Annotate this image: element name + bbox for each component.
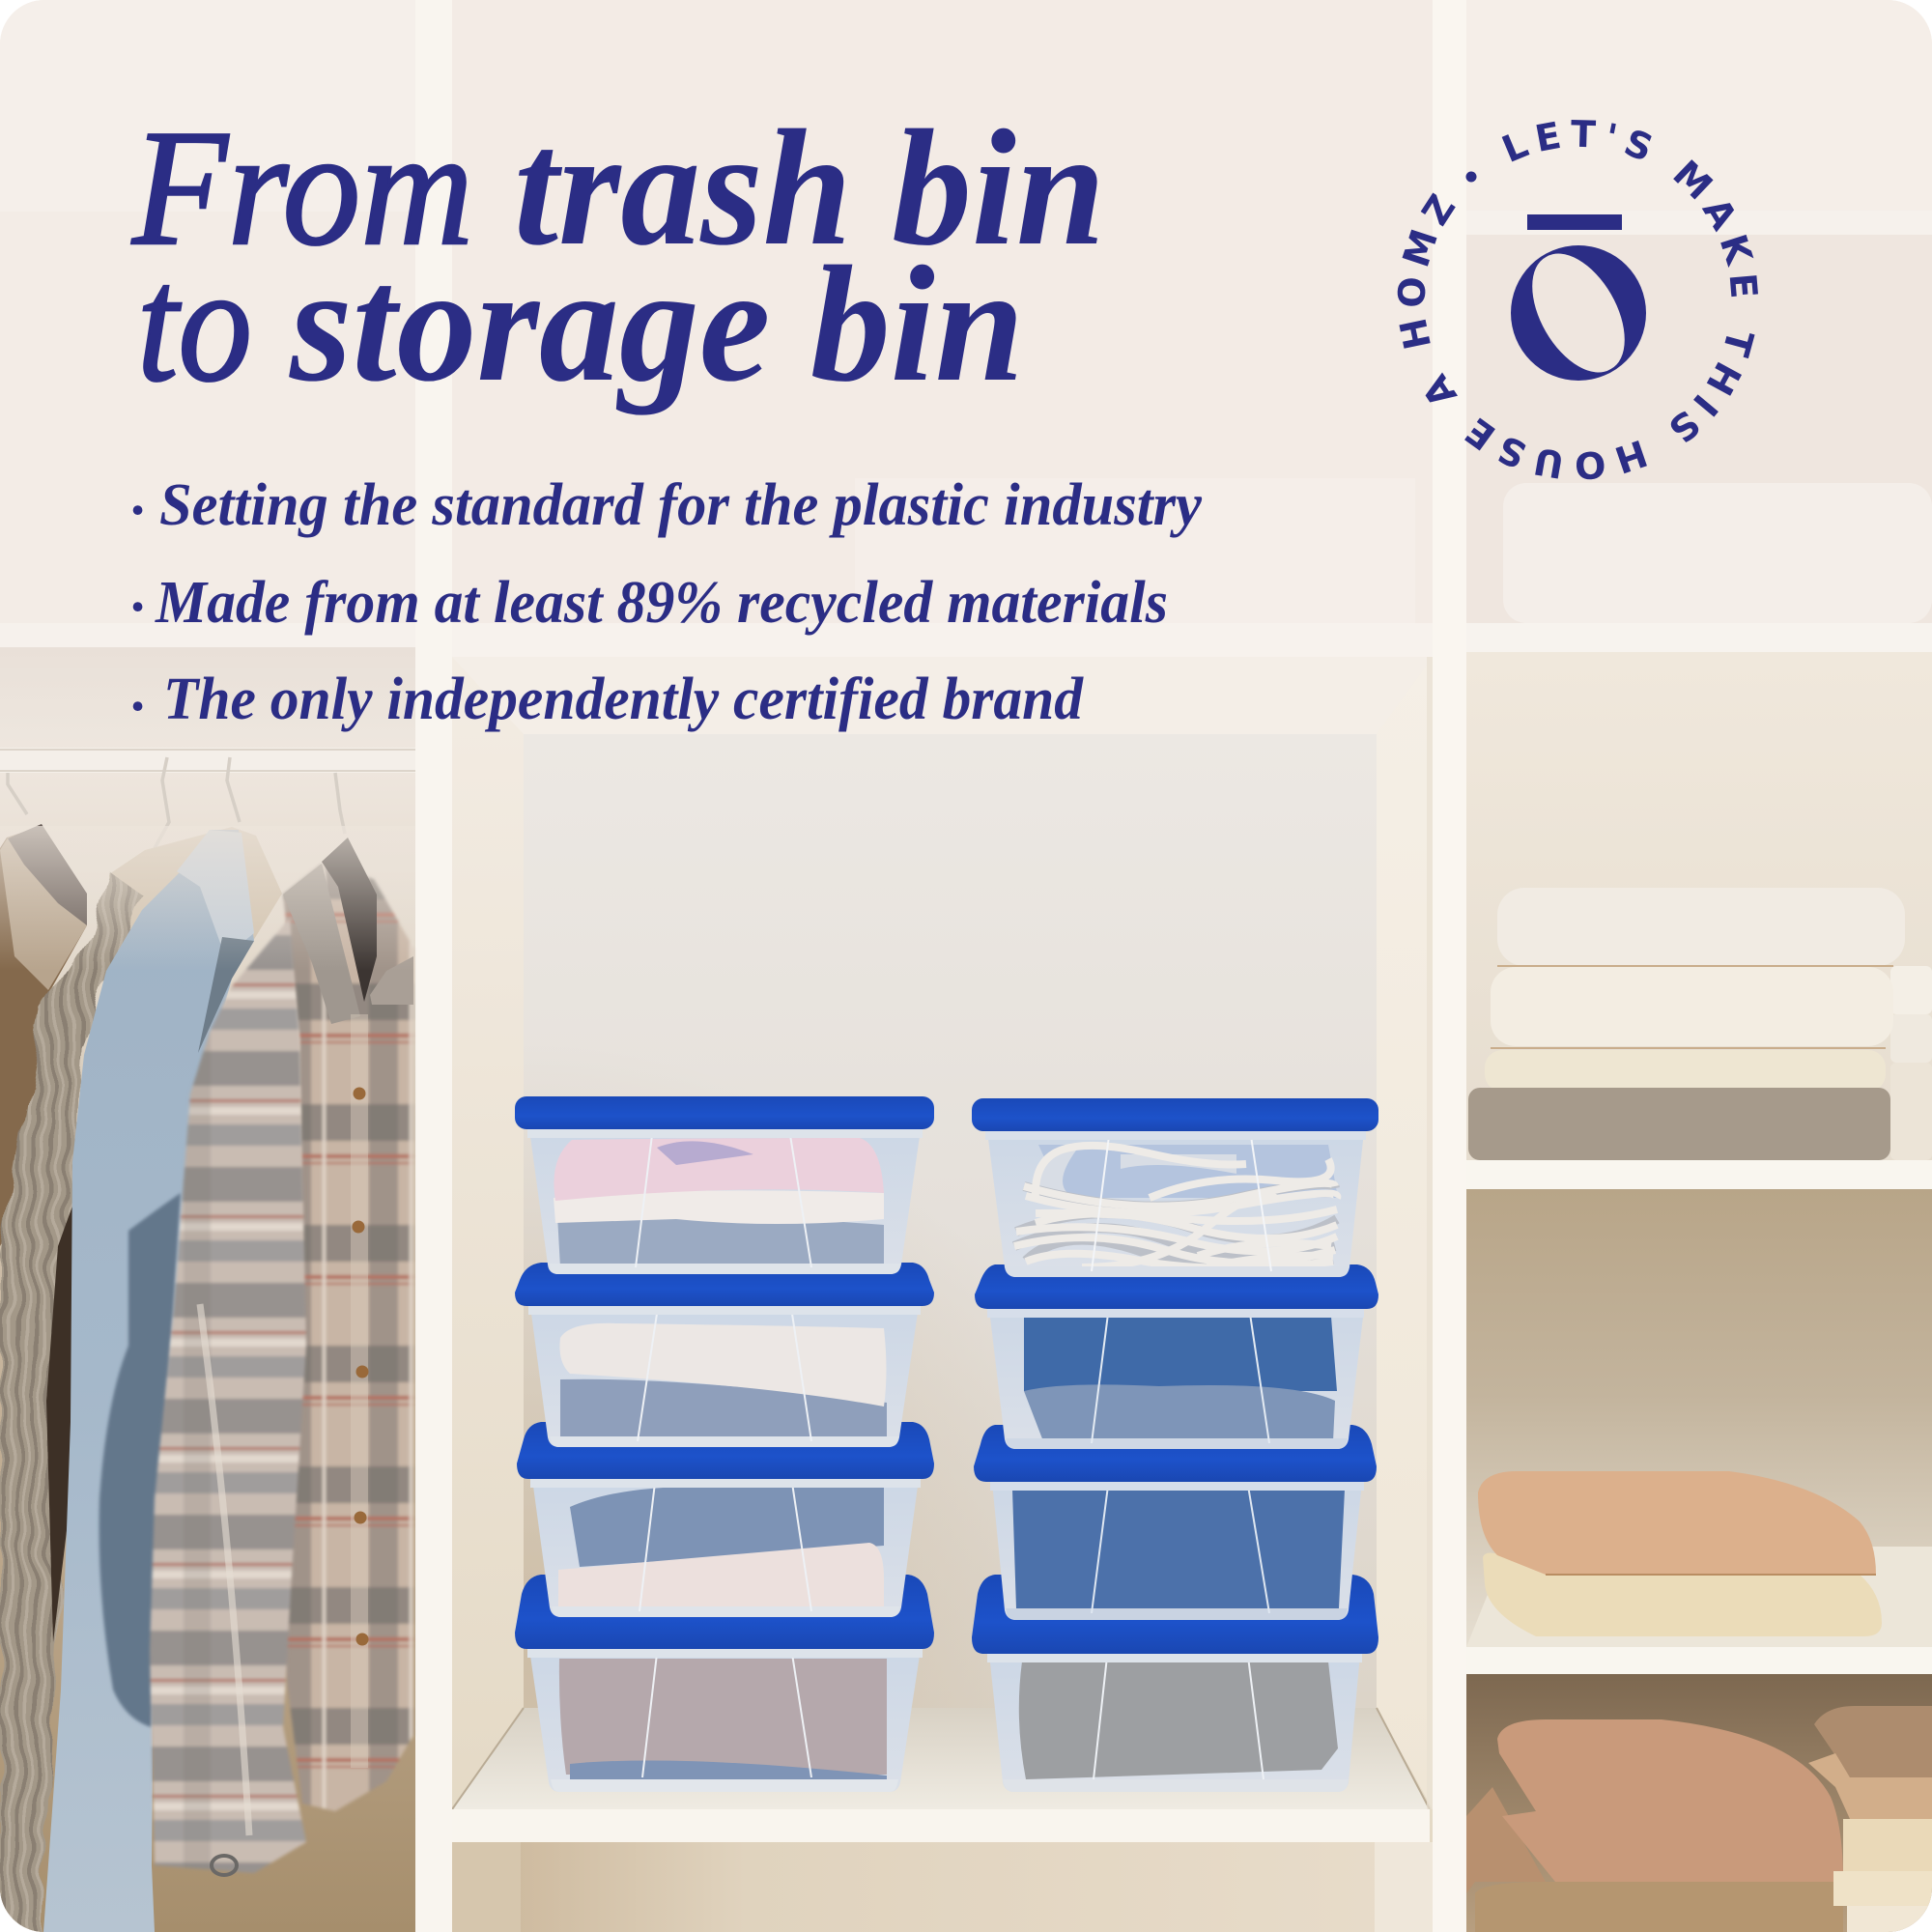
folded blankets: middle shelf xyxy=(1478,1471,1882,1636)
brand mark: macron bar xyxy=(1527,214,1622,230)
bullet list: • xyxy=(131,587,144,626)
bin: left column, top xyxy=(515,1096,934,1274)
vertical closet panels xyxy=(415,0,1466,1932)
bullet list: • xyxy=(131,687,144,725)
garment: beige coat shoulder xyxy=(109,827,282,939)
garment: brown jumper xyxy=(0,826,87,1246)
bin: right column, third xyxy=(974,1425,1377,1620)
icon: shirt buttons xyxy=(352,1088,369,1646)
garment: plaid shirt sleeve xyxy=(150,918,306,1873)
bin: right column, second xyxy=(975,1264,1378,1449)
central cubby xyxy=(452,738,1433,1932)
hanging clothes xyxy=(0,824,415,1932)
separator dot xyxy=(1466,172,1476,182)
brand mark: tilted O xyxy=(1511,245,1646,381)
clothes rail xyxy=(0,748,415,826)
storage bins: bottom row first xyxy=(515,1096,1378,1792)
bullet list: Setting the standard for the plastic industry xyxy=(159,472,1202,538)
title xyxy=(131,97,1105,416)
bin: right column, top xyxy=(972,1098,1378,1277)
bin: left column, bottom xyxy=(515,1575,934,1792)
bullet list: Made from at least 89% recycled materials xyxy=(155,570,1168,636)
bin: right column, bottom xyxy=(972,1575,1378,1792)
bullet list: The only independently certified brand xyxy=(163,667,1084,732)
bundled white cords xyxy=(1014,1184,1337,1266)
left hanging cell xyxy=(0,647,415,1932)
right shelving cell xyxy=(1466,652,1932,1932)
bin: left column, third xyxy=(517,1422,934,1617)
bullet list xyxy=(131,472,1202,732)
circular slogan: LET'S MAKE THIS HOUSE A HOMZ xyxy=(1397,120,1758,479)
bin: left column, second xyxy=(515,1263,934,1447)
title: From xyxy=(131,97,473,280)
bullet list: • xyxy=(131,491,144,529)
title: to xyxy=(137,233,252,416)
garment: knit sweater xyxy=(0,871,142,1932)
logo badge xyxy=(1397,120,1758,479)
garment: plaid shirt body xyxy=(283,864,413,1811)
folded towels: top shelf xyxy=(1468,888,1932,1160)
folded blankets: bottom shelf xyxy=(1466,1706,1932,1932)
garment: denim jacket xyxy=(43,830,254,1932)
title: trash bin xyxy=(514,97,1105,280)
title: storage bin xyxy=(289,233,1024,416)
